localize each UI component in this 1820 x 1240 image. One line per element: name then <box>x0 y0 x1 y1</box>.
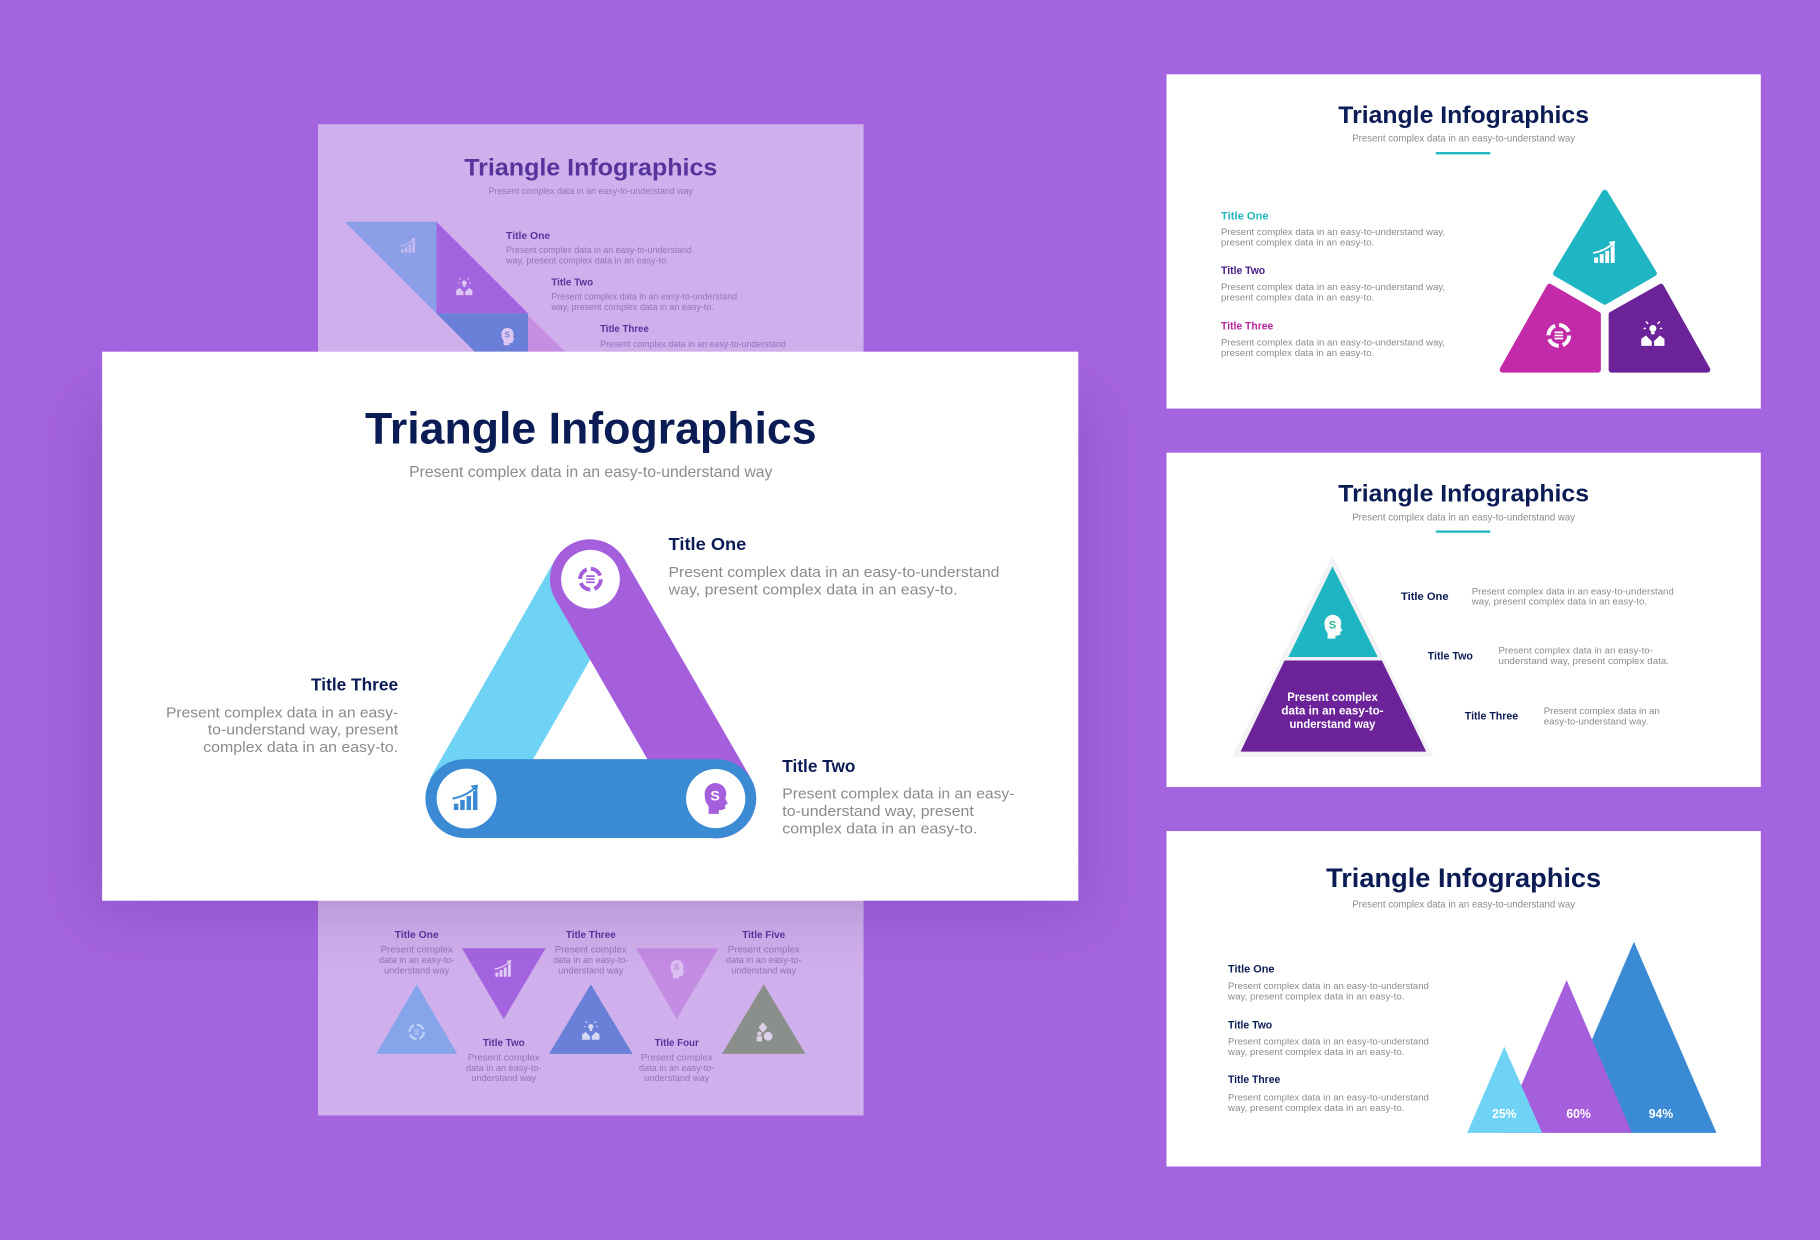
back item two: Title Two <box>551 278 593 289</box>
back item one: way, present complex data in an easy-to. <box>505 255 669 265</box>
item: title two: Present complex data in an easy- <box>782 786 1014 803</box>
main title: Triangle Infographics <box>365 404 817 453</box>
item: title two: Title Two <box>1428 650 1473 662</box>
back item three: Title Three <box>600 324 649 335</box>
item: title one: Present complex data in an easy-to-understand <box>1228 981 1429 992</box>
title: Triangle Infographics <box>1338 102 1589 129</box>
item: title one: Title One <box>1221 210 1269 222</box>
value labels: 25% <box>1492 1106 1516 1121</box>
item: title one <box>1227 964 1429 1002</box>
item: title two: way, present complex data in an easy-to. <box>1227 1047 1404 1058</box>
item: title three: easy-to-understand way. <box>1544 716 1648 727</box>
item: title one: Present complex data in an easy-to-understand way, <box>1221 227 1445 238</box>
item: title two: Title Two <box>1221 265 1265 277</box>
back item one: Title One <box>506 231 550 242</box>
item: title three: Title Three <box>1465 711 1518 723</box>
back label: title four <box>639 1038 714 1083</box>
panel: right slide two <box>1167 453 1761 787</box>
item: title three: Present complex data in an easy-to-understand way, <box>1221 337 1445 348</box>
item: title three <box>1221 321 1445 359</box>
back label: title four: Title Four <box>655 1038 699 1049</box>
back label: title two: understand way <box>471 1073 537 1083</box>
item: title three: Title Three <box>311 675 398 695</box>
panel: main slide <box>102 352 1078 901</box>
icon: cycle <box>1548 325 1569 346</box>
icon: cycle <box>580 569 601 590</box>
back item two <box>550 278 737 312</box>
item: title one: Present complex data in an easy-to-understand <box>669 564 999 581</box>
back label: title two: Title Two <box>483 1038 525 1049</box>
item: title one: Title One <box>1228 964 1274 976</box>
back label: title four: understand way <box>644 1073 710 1083</box>
row of five triangles <box>376 948 806 1054</box>
back label: title one: Title One <box>395 930 439 941</box>
item: title three: Title Three <box>1221 321 1273 333</box>
item: title one: Title One <box>669 534 746 554</box>
item: title one <box>1221 210 1445 248</box>
back label: title three: data in an easy-to- <box>553 955 629 965</box>
title: Triangle Infographics <box>1326 863 1601 893</box>
item: title one: Present complex data in an easy-to-understand <box>1472 586 1674 597</box>
back label: title three: Present complex <box>555 944 627 954</box>
stepped ribbon diagram <box>345 222 565 352</box>
item: title three <box>1465 706 1660 727</box>
panel: faded back slide <box>318 124 864 1115</box>
item: title three: complex data in an easy-to. <box>203 739 398 756</box>
back label: title one <box>379 930 454 975</box>
icon: head with dollar <box>1324 615 1342 639</box>
item: title one: way, present complex data in an easy-to. <box>1227 991 1404 1002</box>
item: title three <box>166 675 399 756</box>
item: title two: understand way, present complex data. <box>1498 656 1669 667</box>
back label: title two: Present complex <box>468 1052 540 1062</box>
back item three: Present complex data in an easy-to-understand <box>600 339 786 349</box>
item: title two: complex data in an easy-to. <box>782 820 977 837</box>
item: title one: way, present complex data in an easy-to. <box>1471 597 1647 608</box>
item: title two: Present complex data in an easy-to-understand <box>1228 1037 1429 1048</box>
panel: right slide three <box>1167 831 1761 1167</box>
pyramid diagram <box>1232 556 1433 757</box>
back label: title two <box>466 1038 542 1083</box>
back item two: way, present complex data in an easy-to. <box>550 302 714 312</box>
back label: title one: understand way <box>384 965 450 975</box>
icon: head with dollar: S <box>710 787 720 803</box>
item: title three: Present complex data in an easy-to-understand <box>1228 1092 1429 1103</box>
item: title two <box>1428 645 1669 667</box>
value labels: 94% <box>1649 1106 1673 1121</box>
item: title three: Title Three <box>1228 1074 1280 1086</box>
back label: title four: data in an easy-to- <box>639 1063 714 1073</box>
back slide subtitle: Present complex data in an easy-to-understand way <box>489 186 693 196</box>
panel: right slide one <box>1167 74 1761 409</box>
back label: title five: Title Five <box>742 930 785 941</box>
back slide title: Triangle Infographics <box>464 154 717 181</box>
pyramid caption: data in an easy-to- <box>1281 704 1384 717</box>
pyramid caption: Present complex <box>1287 691 1378 704</box>
item: title three: to-understand way, present <box>208 722 399 739</box>
item: title one <box>1401 586 1674 608</box>
back item one <box>505 231 692 265</box>
subtitle: Present complex data in an easy-to-understand way <box>1352 513 1575 524</box>
back item two: Present complex data in an easy-to-understand <box>551 291 737 301</box>
item: title two: to-understand way, present <box>782 803 975 820</box>
item: title three: Present complex data in an easy- <box>166 704 398 721</box>
triangle diagram <box>425 550 756 838</box>
subtitle: Present complex data in an easy-to-understand way <box>1352 900 1575 911</box>
back label: title three: Title Three <box>566 930 616 941</box>
item: title three: Present complex data in an <box>1544 706 1660 717</box>
back label: title five: data in an easy-to- <box>726 955 802 965</box>
value labels: 60% <box>1566 1106 1591 1121</box>
stepped ribbon diagram: S <box>505 330 510 339</box>
subtitle: Present complex data in an easy-to-understand way <box>1352 134 1575 145</box>
value labels <box>1492 1106 1673 1121</box>
item: title two: Present complex data in an easy-to-understand way, <box>1221 282 1445 293</box>
item: title two <box>1227 1019 1429 1058</box>
back label: title five: Present complex <box>728 944 800 954</box>
icon: growth chart <box>453 785 478 810</box>
item: title two: Title Two <box>782 756 855 776</box>
back item three <box>600 324 786 349</box>
item: title two: Present complex data in an easy-to- <box>1498 645 1653 656</box>
segmented triangle diagram <box>1503 193 1707 370</box>
icon: people with idea <box>1641 322 1664 346</box>
icon: growth chart <box>1593 241 1615 263</box>
back item one: Present complex data in an easy-to-understand <box>506 245 692 255</box>
item: title two <box>782 756 1014 837</box>
item: title three <box>1227 1074 1429 1114</box>
back label: title one: data in an easy-to- <box>379 955 454 965</box>
main subtitle: Present complex data in an easy-to-understand way <box>409 464 773 481</box>
back label: title four: Present complex <box>641 1052 713 1062</box>
item: title three: present complex data in an easy-to. <box>1221 348 1374 359</box>
back label: title three <box>553 930 629 975</box>
back label: title five: understand way <box>731 965 797 975</box>
item: title one <box>668 534 999 598</box>
item: title two <box>1221 265 1445 304</box>
back label: title two: data in an easy-to- <box>466 1063 542 1073</box>
triangle chart <box>1467 942 1716 1133</box>
item: title two: Title Two <box>1228 1019 1272 1031</box>
back label: title one: Present complex <box>381 944 453 954</box>
back label: title three: understand way <box>558 965 624 975</box>
pyramid caption: understand way <box>1290 718 1376 731</box>
item: title one: way, present complex data in an easy-to. <box>668 581 958 598</box>
item: title one: present complex data in an easy-to. <box>1221 237 1374 248</box>
item: title two: present complex data in an easy-to. <box>1221 293 1374 304</box>
item: title three: way, present complex data in an easy-to. <box>1227 1103 1404 1114</box>
icon: head with dollar: S <box>1329 619 1336 631</box>
row of five triangles: S <box>674 962 680 972</box>
back label: title five <box>726 930 802 975</box>
pyramid caption <box>1281 691 1384 731</box>
title: Triangle Infographics <box>1338 480 1589 507</box>
icon: head with dollar <box>705 783 728 814</box>
item: title one: Title One <box>1401 591 1449 603</box>
